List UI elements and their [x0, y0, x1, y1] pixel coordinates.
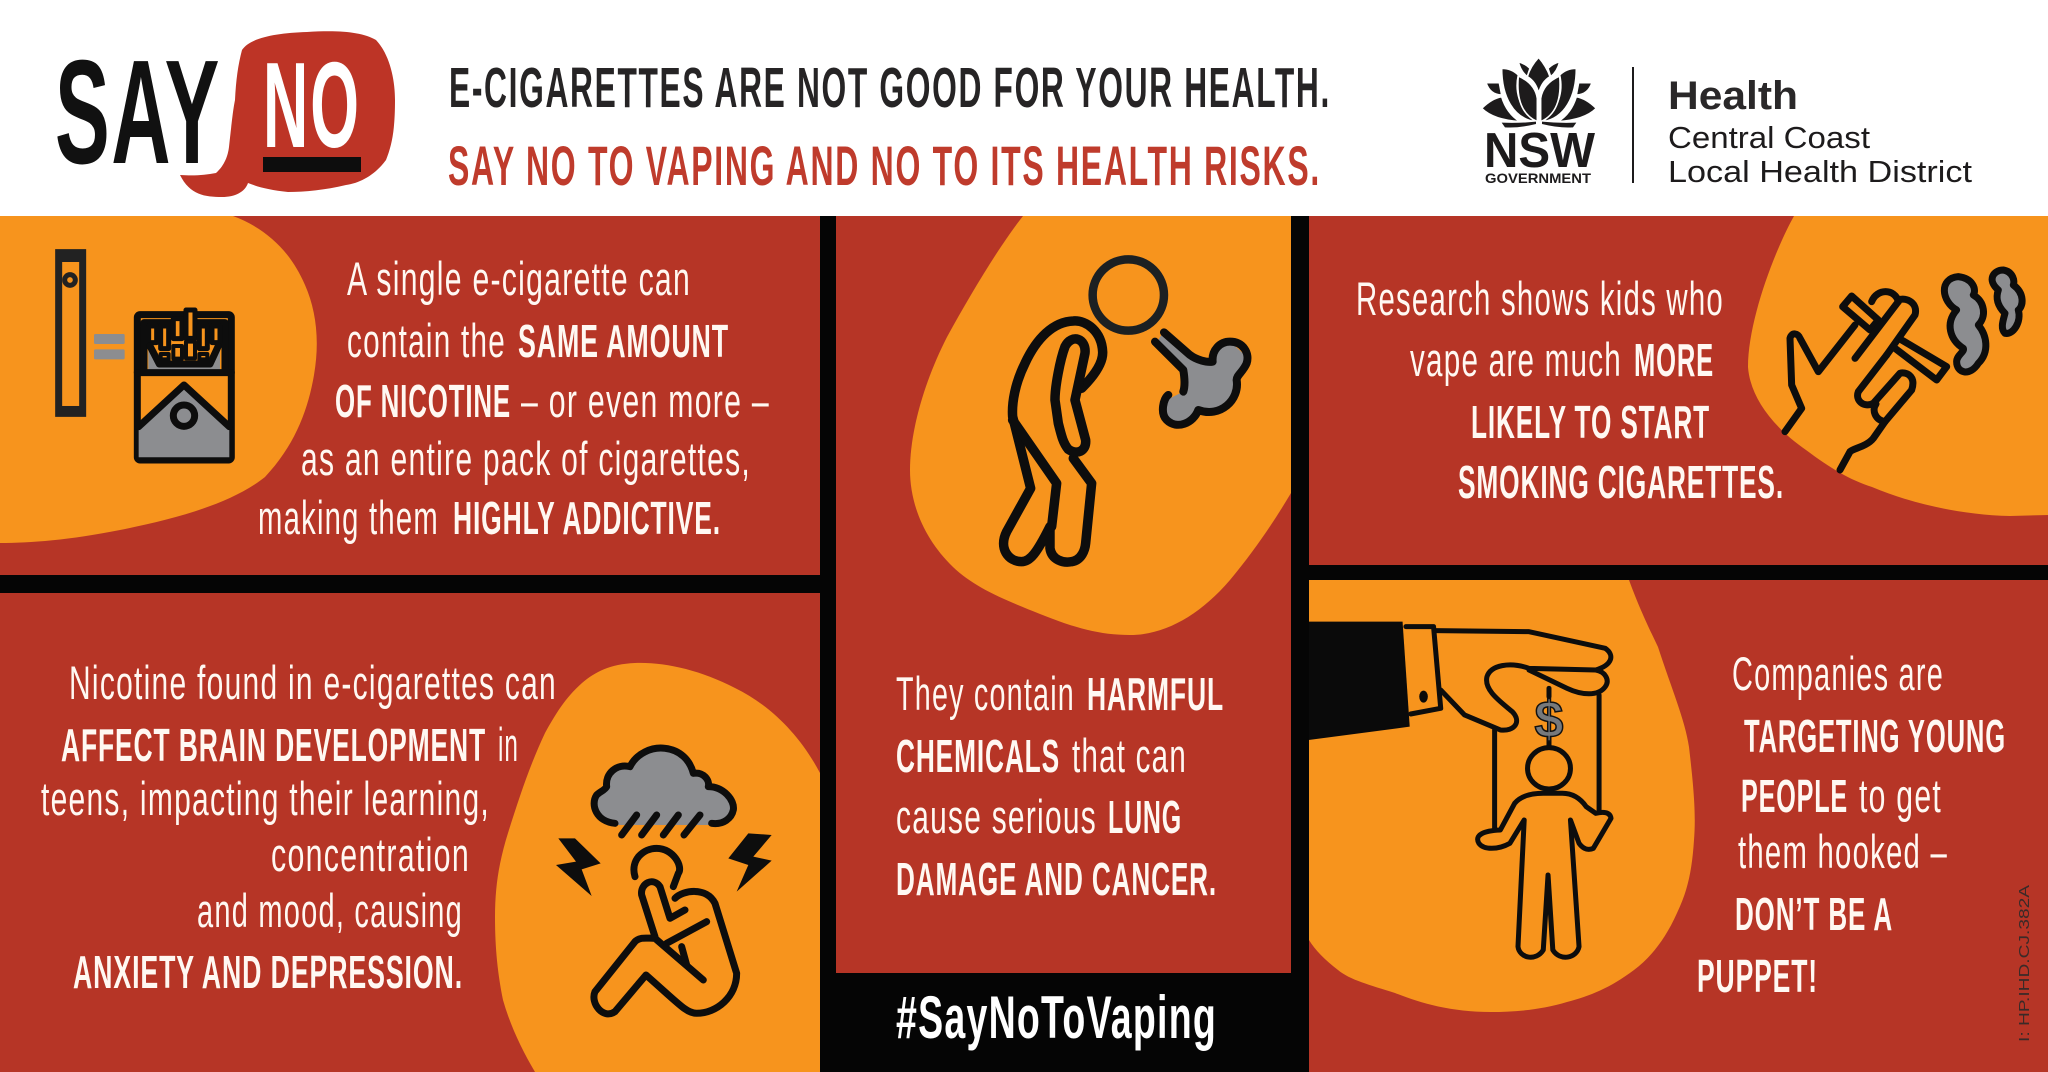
icon: hand controlling puppet [1309, 622, 1611, 957]
text block: nicotine amount: contain the [347, 314, 506, 367]
text block: kids more likely to smoke [1356, 272, 1784, 508]
text block: harmful chemicals: DAMAGE AND CANCER. [896, 853, 1217, 905]
text block: brain development: teens, impacting their learning, [41, 772, 490, 825]
panel: harmful chemicals [896, 216, 1291, 905]
panel: kids more likely to smoke [1356, 216, 2048, 516]
text block: harmful chemicals: HARMFUL [1087, 668, 1224, 720]
text block: brain development: in [498, 718, 519, 771]
text block: kids more likely to smoke: Research shows kids who [1356, 272, 1724, 325]
text block: kids more likely to smoke: LIKELY TO START [1471, 396, 1710, 448]
orange blob: top left [0, 216, 317, 543]
text block: companies targeting young people: to get [1859, 769, 1942, 822]
text block: nicotine amount: as an entire pack of cigarettes, [301, 432, 751, 485]
icon: dollar sign: $ [1535, 691, 1564, 749]
panel background: red panels [0, 216, 2048, 1072]
logo: NSW Government waratah: NSW [1484, 124, 1596, 178]
heading: two-line headline: E-CIGARETTES ARE NOT GOOD FOR YOUR HEALTH. [449, 56, 1331, 120]
divider line [1632, 67, 1634, 183]
logo: Say No speech bubble: SAY [55, 30, 221, 195]
text block: harmful chemicals: that can [1072, 729, 1187, 782]
text: Central Coast Local Health District: Central Coast [1668, 120, 1870, 155]
text block: harmful chemicals [896, 667, 1224, 905]
text: Central Coast Local Health District [1668, 74, 1972, 189]
heading: two-line headline: SAY NO TO VAPING AND NO TO ITS HEALTH RISKS. [448, 134, 1321, 197]
text: Central Coast Local Health District: Local Health District [1668, 154, 1972, 189]
text block: harmful chemicals: cause serious [896, 790, 1097, 843]
logo: Say No speech bubble: NO [263, 37, 361, 173]
text block: harmful chemicals: They contain [896, 667, 1075, 720]
text block: nicotine amount: making them [258, 491, 439, 544]
text block: kids more likely to smoke: MORE [1634, 334, 1714, 386]
text block: brain development: AFFECT BRAIN DEVELOPMENT [61, 719, 486, 771]
orange blob: centre [910, 216, 1291, 635]
text block: brain development: Nicotine found in e-cigarettes can [69, 656, 557, 709]
text block: kids more likely to smoke: vape are much [1410, 333, 1622, 386]
logo: NSW Government waratah [1482, 57, 1596, 186]
icon: distressed person under rain cloud [556, 748, 772, 1014]
icon: hand holding cigarette with smoke [1785, 270, 2022, 470]
text block: nicotine amount: HIGHLY ADDICTIVE. [453, 492, 721, 544]
hashtag banner: #SayNoToVaping [896, 984, 1217, 1051]
text block: harmful chemicals: LUNG [1108, 791, 1182, 843]
icon: person coughing smoke [1004, 259, 1247, 562]
text block: nicotine amount: OF NICOTINE [335, 375, 511, 427]
text: Central Coast Local Health District: Health [1668, 74, 1798, 118]
text block: nicotine amount: A single e-cigarette can [347, 252, 691, 305]
text: reference code: I: HP.IHD.CJ.382A [2016, 885, 2033, 1042]
text block: brain development: ANXIETY AND DEPRESSION. [73, 946, 463, 998]
panel: brain development [41, 656, 820, 1072]
text block: companies targeting young people: DON’T BE A [1735, 888, 1893, 940]
panel: companies targeting young people [1309, 580, 2033, 1042]
icon: vape device equals cigarette pack [56, 250, 231, 460]
text block: kids more likely to smoke: SMOKING CIGARETTES. [1458, 456, 1784, 508]
orange blob: bottom left [495, 663, 820, 1072]
text block: companies targeting young people: PUPPET! [1697, 950, 1818, 1002]
orange blob: top right [1748, 216, 2048, 516]
text block: nicotine amount: SAME AMOUNT [518, 315, 729, 367]
text block: companies targeting young people: PEOPLE [1741, 770, 1848, 822]
text block: companies targeting young people [1697, 647, 2006, 1002]
text block: harmful chemicals: CHEMICALS [896, 730, 1060, 782]
text block: brain development: concentration [271, 828, 470, 881]
hashtag banner [820, 973, 1309, 1072]
orange blob: bottom right [1309, 580, 1695, 1012]
heading: two-line headline [448, 56, 1331, 197]
text block: nicotine amount [258, 252, 770, 544]
logo: NSW Government waratah: GOVERNMENT [1485, 170, 1591, 186]
text block: nicotine amount: – or even more – [521, 374, 770, 427]
text block: brain development: and mood, causing [197, 884, 463, 937]
panel: nicotine amount [0, 216, 770, 544]
text block: brain development [41, 656, 557, 998]
